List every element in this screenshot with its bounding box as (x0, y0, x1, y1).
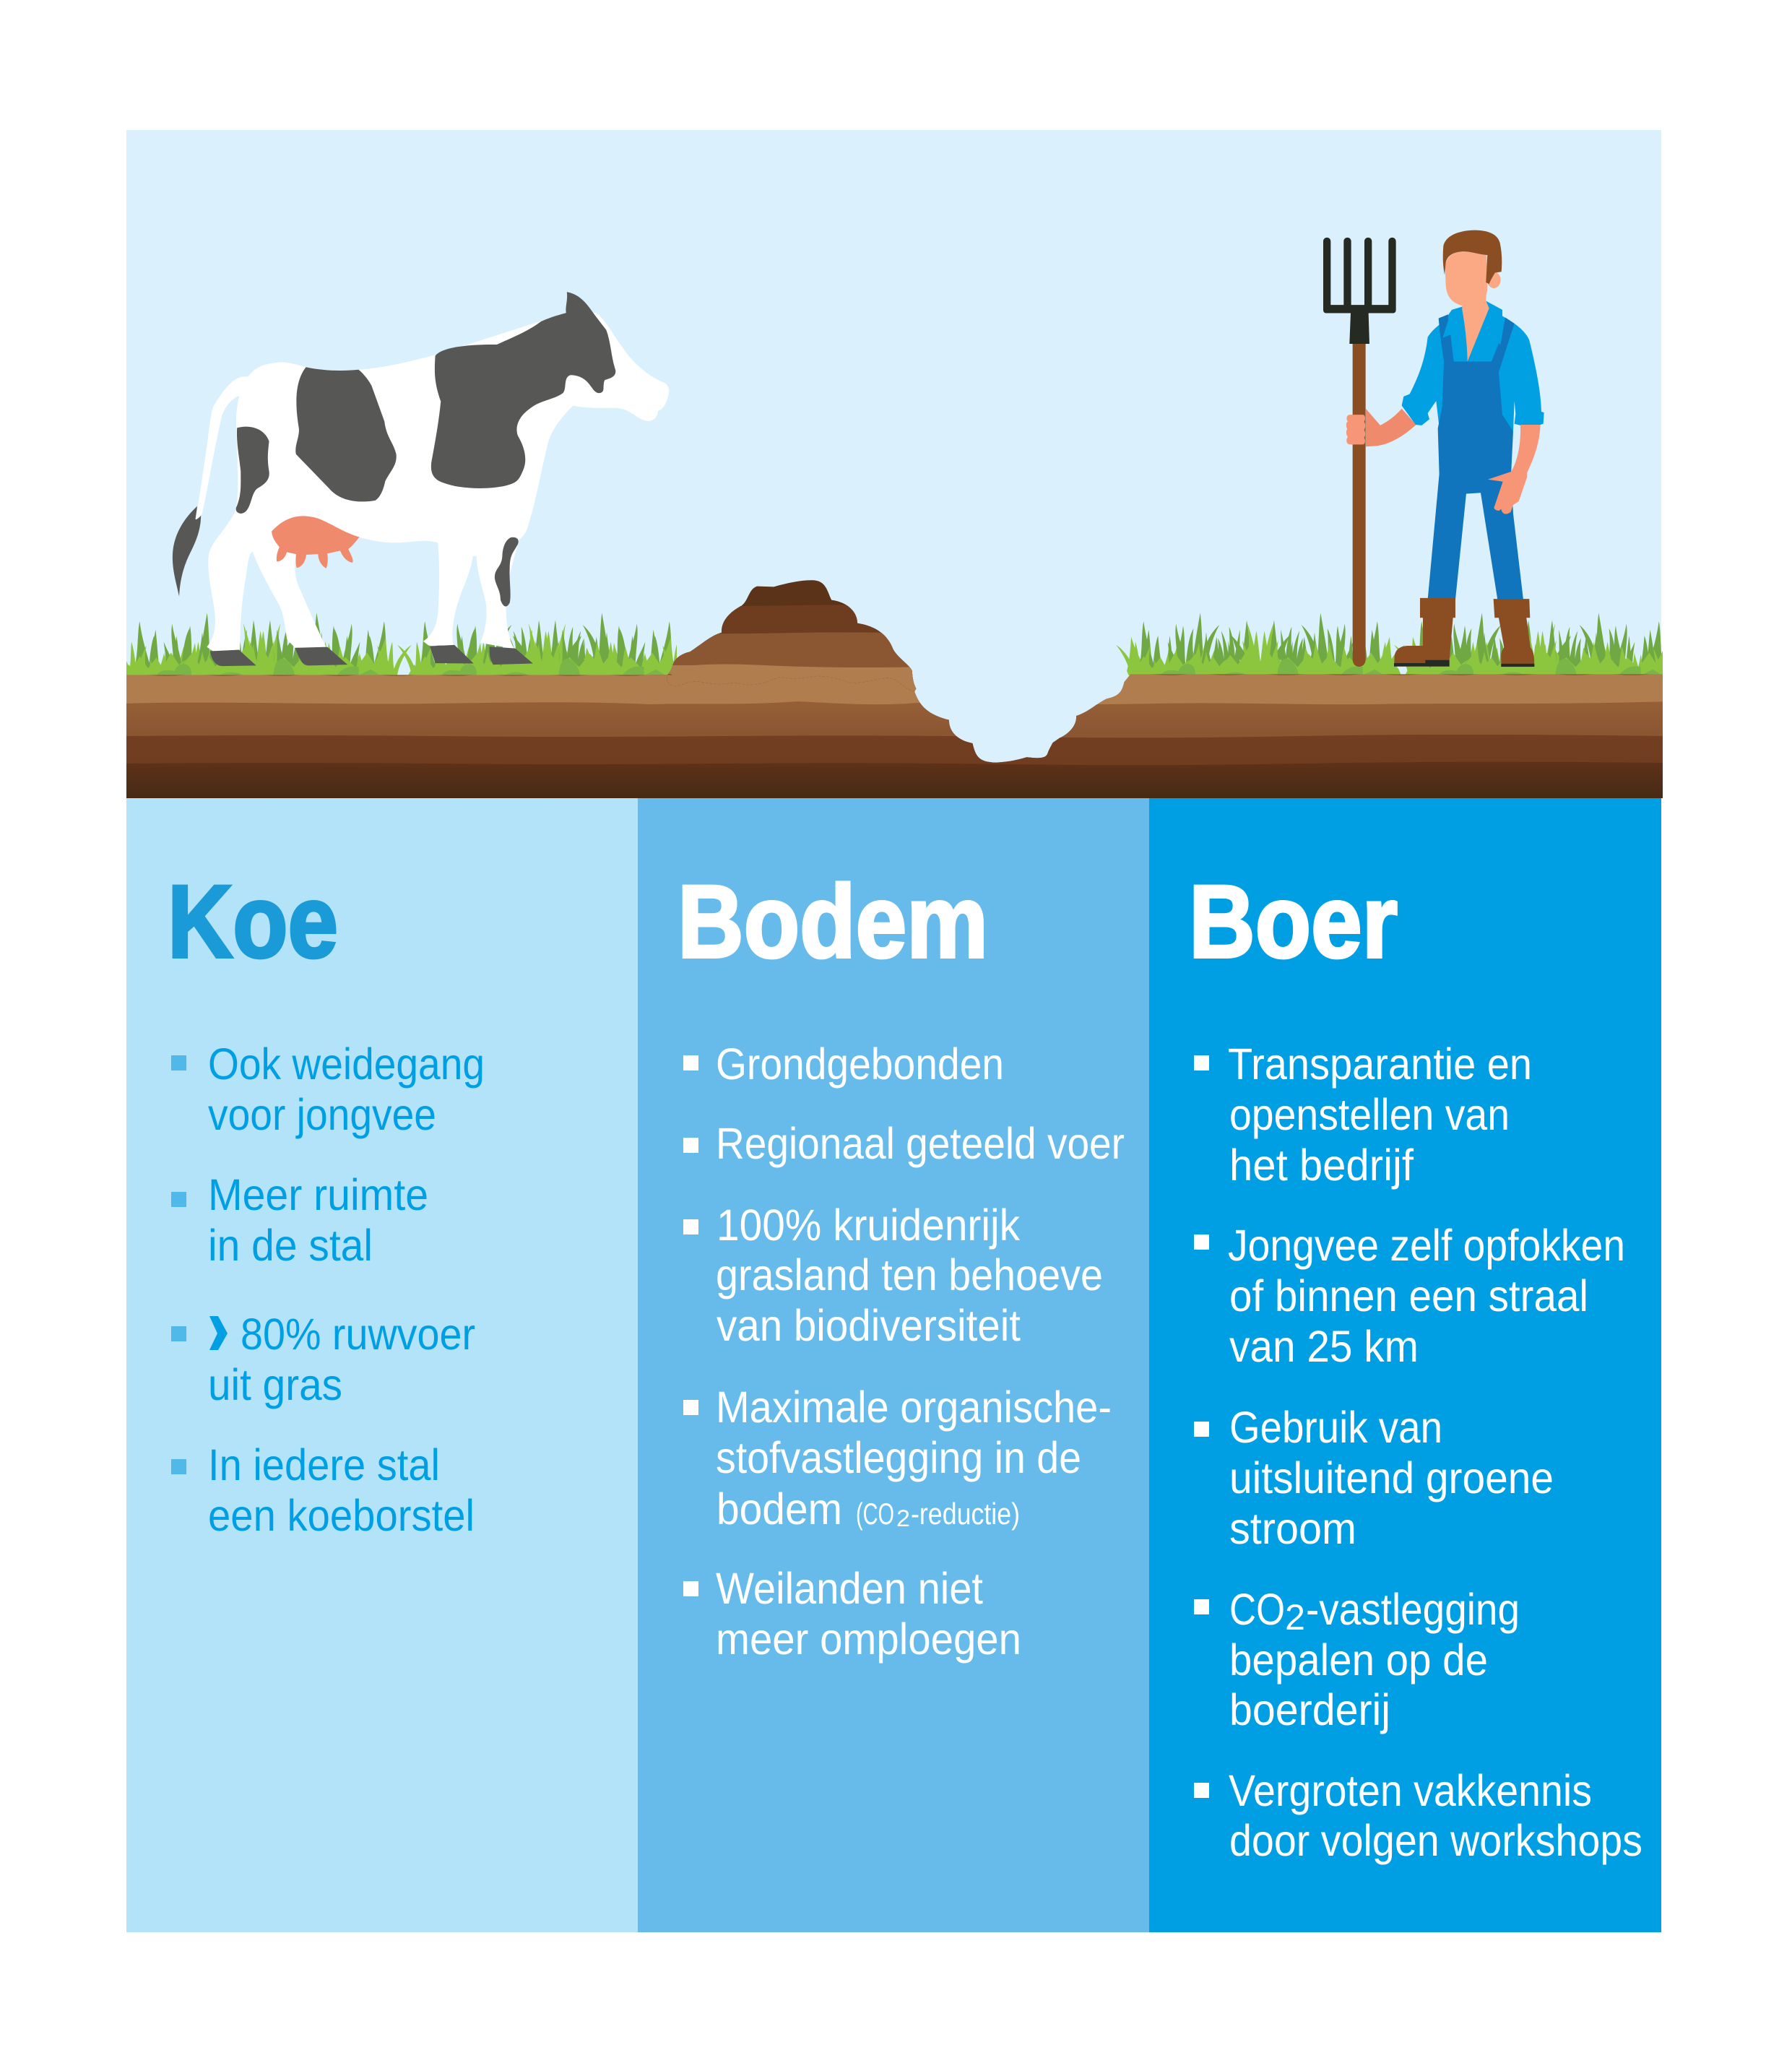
bullet: Jongvee zelf opfokken: Jongvee zelf opfokken (1228, 1221, 1625, 1270)
farmer right boot sole (1501, 664, 1534, 667)
cow udder (272, 516, 360, 568)
bullet: 100% kruidenrijk grasland (683, 1201, 1103, 1350)
bullet: more than 80% ruwvoer uit gras: uit gras (208, 1360, 342, 1409)
bullet: more than 80% ruwvoer uit gras: 80% ruwvoer (241, 1310, 475, 1359)
cow tail switch (173, 506, 201, 597)
bullet: Transparantie: Transparantie en (1228, 1039, 1532, 1089)
bullet: In iedere stal een koeborstel: een koeborstel (208, 1491, 475, 1540)
bullet: Maximale organische-stofvastlegging (683, 1383, 1112, 1534)
farmer right boot (1494, 599, 1534, 667)
farmer neck and chest (1462, 282, 1489, 361)
farmer left boot sole (1394, 660, 1450, 667)
farmer overalls (1428, 314, 1523, 600)
cow spot: flank (295, 367, 397, 501)
bullet: Gebruik groene stroom (1194, 1403, 1554, 1553)
panel: Koe (126, 798, 638, 1932)
bullet: 100% kruidenrijk grasland: grasland ten behoeve (716, 1250, 1103, 1299)
bullet: Grondgebonden: Grondgebonden (716, 1039, 1004, 1089)
panel: Boer (1149, 798, 1661, 1932)
bullet: Gebruik groene stroom: stroom (1229, 1504, 1356, 1553)
bullet: Weilanden niet meer omploegen: meer omploegen (716, 1614, 1021, 1664)
bullet: Gebruik groene stroom: uitsluitend groene (1229, 1453, 1554, 1502)
farmer left arm (1366, 409, 1416, 446)
bullet: Vergroten vakkennis: Vergroten vakkennis (1229, 1766, 1592, 1815)
Boer panel background (1149, 798, 1661, 1932)
pitchfork handle (1353, 343, 1366, 667)
bullet: CO2-vastlegging (1194, 1585, 1520, 1734)
bullet: 100% kruidenrijk grasland: 100% kruidenrijk (717, 1201, 1020, 1250)
bullet: Gebruik groene stroom: Gebruik van (1229, 1403, 1442, 1452)
bullet: Vergroten vakkennis: door volgen workshops (1229, 1816, 1642, 1865)
infographic: Koe, Bodem, Boer (126, 130, 1663, 1932)
cow spot: front leg (495, 537, 519, 607)
bullet: CO2-vastlegging: boerderij (1229, 1685, 1390, 1734)
bullet: Regionaal geteeld voer: Regionaal geteeld voer (716, 1119, 1125, 1168)
Koe panel background (126, 798, 638, 1932)
bullet: Jongvee zelf opfokken (1194, 1221, 1625, 1371)
panel: sky background (126, 130, 1661, 799)
bullet: CO2-vastlegging: 2 (1285, 1597, 1305, 1638)
farmer shirt (1402, 300, 1544, 431)
heading: Boer: Boer (1189, 865, 1398, 979)
cow hooves (210, 645, 533, 666)
bullet: Maximale organische-stofvastlegging: -reductie) (911, 1497, 1020, 1531)
bullet: CO2-vastlegging: -vastlegging (1306, 1585, 1520, 1634)
bullet: Meer ruimte in de stal: Meer ruimte (208, 1170, 428, 1219)
bullet: Jongvee zelf opfokken: of binnen een straal (1229, 1271, 1588, 1320)
farmer hair (1443, 230, 1502, 284)
bullet: Meer ruimte in de stal (171, 1170, 428, 1270)
bullet: Transparantie: het bedrijf (1229, 1141, 1414, 1190)
panel: Bodem (638, 798, 1149, 1932)
pitchfork head (1323, 238, 1396, 344)
heading: Koe: Koe (168, 865, 338, 979)
bullet: Jongvee zelf opfokken: van 25 km (1229, 1322, 1419, 1371)
farmer face (1445, 251, 1487, 306)
bullet: Transparantie (1194, 1039, 1532, 1190)
grass: right meadow (1116, 613, 1687, 675)
bullet: Weilanden niet meer omploegen: Weilanden niet (716, 1564, 983, 1613)
bullet: Weilanden niet meer omploegen (683, 1564, 1021, 1664)
farmer fist (1346, 415, 1365, 444)
bullet: more than 80% ruwvoer uit gras (171, 1310, 475, 1409)
illustration: cow (173, 292, 669, 666)
bullet: In iedere stal een koeborstel (171, 1440, 475, 1540)
bullet: Maximale organische-stofvastlegging: (CO (856, 1497, 894, 1531)
bullet: Ook weidegang voor jongvee: Ook weidegang (208, 1039, 485, 1089)
Bodem panel background (638, 798, 1149, 1932)
farmer ear (1487, 272, 1501, 288)
bullet: Maximale organische-stofvastlegging: 2 (896, 1505, 910, 1531)
soil cross-section with mound and pit (123, 571, 1676, 802)
cow body (196, 313, 669, 652)
bullet: CO2-vastlegging: bepalen op de (1229, 1635, 1488, 1684)
farmer left boot (1394, 598, 1455, 667)
bullet: Meer ruimte in de stal: in de stal (208, 1221, 373, 1270)
cow spot: rump (236, 427, 269, 514)
cow spot: head and shoulder (431, 292, 615, 488)
illustration: farmer with pitchfork (1323, 230, 1544, 667)
bullet: In iedere stal een koeborstel: In iedere stal (208, 1440, 440, 1489)
bullet: CO2-vastlegging: CO (1229, 1585, 1285, 1634)
bullet: Ook weidegang voor jongvee: voor jongvee (208, 1090, 436, 1139)
heading: Bodem: Bodem (678, 865, 988, 979)
bullet: Maximale organische-stofvastlegging: stofvastlegging in de (716, 1433, 1081, 1482)
bullet: Vergroten vakkennis (1194, 1766, 1642, 1865)
bullet: Transparantie: openstellen van (1229, 1090, 1510, 1139)
farmer right forearm and hand (1488, 425, 1541, 514)
grass: left meadow (112, 613, 697, 675)
bullet: Ook weidegang voor jongvee (171, 1039, 485, 1139)
bullet: Maximale organische-stofvastlegging: Maximale organische- (716, 1383, 1112, 1432)
bullet: 100% kruidenrijk grasland: van biodiversiteit (717, 1301, 1021, 1350)
bullet: Maximale organische-stofvastlegging: bodem (717, 1484, 842, 1534)
